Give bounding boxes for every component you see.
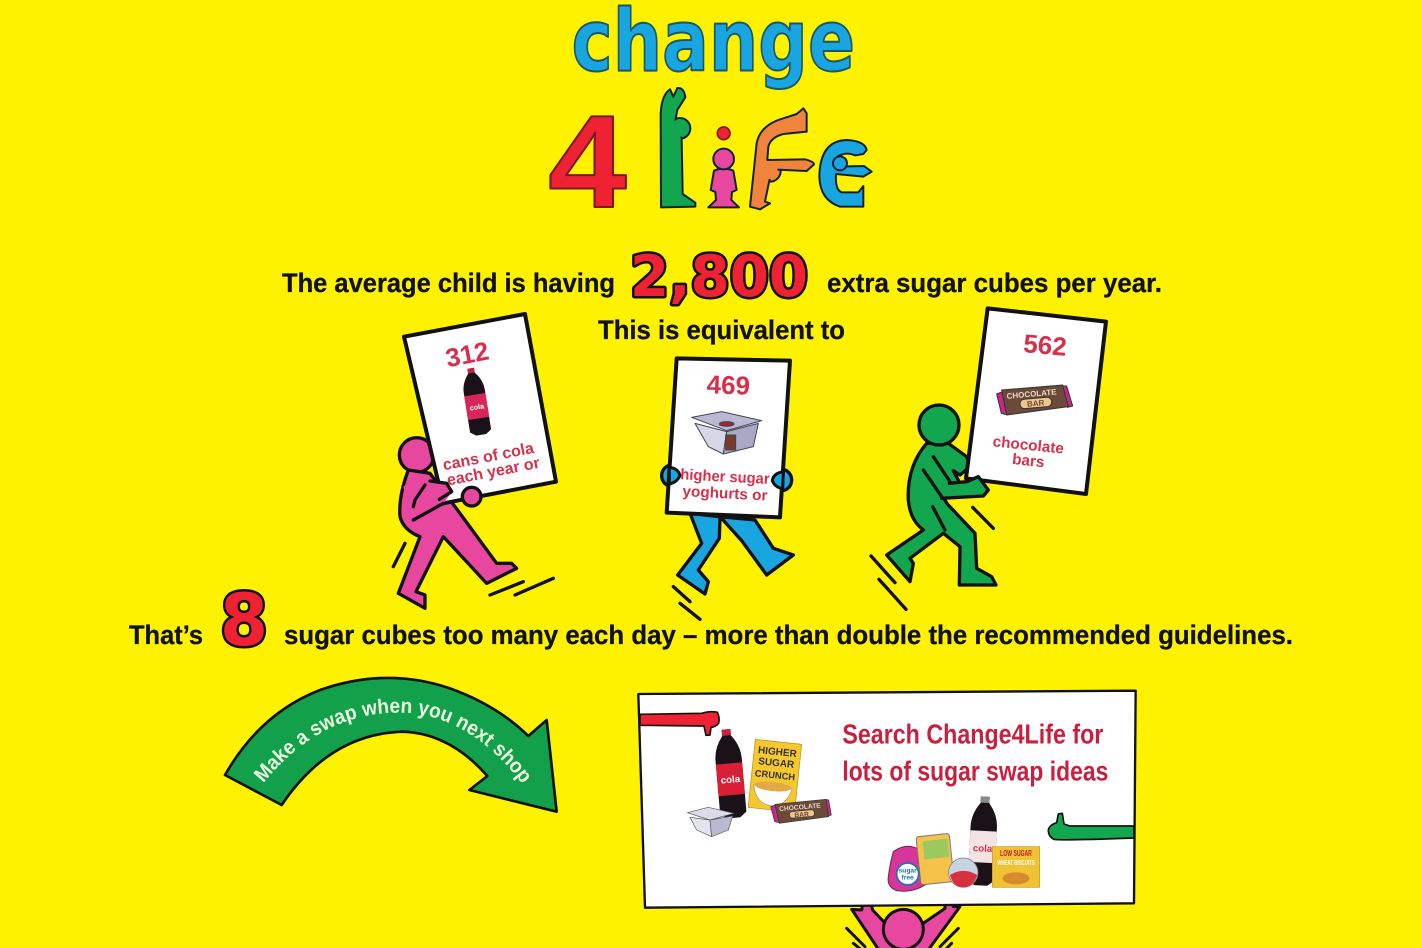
- low sugar cereal box: WHEAT BISCUITS: [997, 858, 1035, 867]
- low sugar cereal box: LOW SUGAR: [1000, 848, 1032, 858]
- body lines and speed lines: [871, 457, 993, 609]
- icon: chocolate bar: [997, 385, 1073, 415]
- fruit pot: [949, 858, 978, 887]
- green figure head: [919, 405, 959, 445]
- sign number: 312: 312: [443, 335, 491, 373]
- higher sugar cereal box: SUGAR: [758, 756, 795, 771]
- sugar free jelly: [888, 846, 927, 891]
- green hand: [940, 477, 988, 498]
- speed lines: [393, 543, 553, 595]
- sign caption: each year or: each year or: [446, 455, 541, 489]
- chocolate bar: [771, 799, 831, 823]
- higher sugar cereal box: CRUNCH: [754, 768, 796, 782]
- higher sugar cereal box: HIGHER: [757, 745, 797, 760]
- figure: pink carrying cola sign: [393, 314, 556, 608]
- diet cola bottle: [967, 796, 999, 886]
- logo letter i: pink figure: [708, 149, 739, 207]
- sign caption: yoghurts or: yoghurts or: [682, 483, 768, 505]
- panel background: [638, 691, 1136, 908]
- headline text: average child: The average child is having: [282, 268, 615, 298]
- arrow: make a swap: [224, 676, 558, 813]
- green hand outline: [942, 477, 988, 498]
- logo letter e: blue figure: [819, 140, 872, 207]
- icon: chocolate bar: CHOCOLATE: [1006, 387, 1058, 401]
- sign caption: higher sugar: higher sugar: [680, 466, 770, 488]
- panel: sugar swap ideas: [638, 691, 1136, 948]
- blue legs: [678, 513, 793, 594]
- sign number: 562: 562: [1022, 328, 1068, 362]
- sign caption: chocolate: chocolate: [992, 433, 1065, 458]
- sign caption: cans of cola: cans of cola: [441, 440, 536, 474]
- sign number: 469: 469: [706, 369, 751, 401]
- panel text line two: lots of sugar swap ideas: [842, 756, 1108, 787]
- sign: chocolate: [966, 308, 1106, 494]
- icon: chocolate bar: BAR: [1027, 398, 1045, 409]
- chocolate bar: BAR: [794, 811, 809, 819]
- figure: blue carrying yoghurt sign: [662, 358, 793, 619]
- headline line two: This is equivalent to: [598, 315, 845, 345]
- logo letter F: orange figure: [750, 108, 814, 209]
- big number: 8: 8: [220, 578, 268, 662]
- pink arm and hand: [403, 477, 481, 520]
- speed lines: [673, 587, 700, 619]
- sugar free jelly: sugar: [899, 868, 917, 875]
- icon: cola bottle: [460, 367, 492, 437]
- blue fingers over sign: [669, 467, 783, 489]
- green figure body: [887, 443, 996, 585]
- sign caption: bars: bars: [1011, 451, 1045, 471]
- logo letter L: green figure: [661, 88, 695, 207]
- big number: 2,800: 2,800: [630, 244, 808, 310]
- icon: yoghurt pot: [692, 412, 762, 454]
- sign: cola: [404, 314, 556, 503]
- statement line: [129, 578, 1293, 662]
- pink figure body: [398, 470, 517, 608]
- headline line one: [282, 244, 1162, 310]
- hand: red thumbs down: [640, 712, 719, 735]
- cola bottle: [713, 728, 747, 819]
- yoghurt pot: [687, 807, 734, 837]
- statement text: that's: That’s: [129, 620, 203, 650]
- low sugar cereal box: [992, 847, 1040, 887]
- panel text line one: Search Change4Life for: [842, 718, 1104, 749]
- diet cola bottle: cola: [973, 843, 993, 855]
- higher sugar cereal box: [748, 739, 802, 812]
- pink figure head: [399, 438, 434, 472]
- sign: yoghurt: [667, 358, 790, 517]
- cola bottle: cola: [720, 774, 741, 787]
- statement text: sugar cubes: sugar cubes too many each day – more than double the recommended guidelines.: [284, 620, 1293, 650]
- logo dot: red: [717, 127, 730, 140]
- sugar free jelly: free: [902, 874, 914, 881]
- icon: cola bottle: cola: [469, 401, 486, 413]
- chocolate bar: CHOCOLATE: [779, 802, 822, 813]
- cereal pouch: [916, 833, 954, 885]
- headline text: extra sugar cubes: extra sugar cubes per year.: [827, 268, 1162, 298]
- hand: green thumbs up: [1048, 813, 1134, 840]
- pink figure holding panel: [847, 900, 960, 948]
- arrow shape: [225, 678, 557, 812]
- logo: change4life: [548, 0, 872, 235]
- products: higher sugar: [687, 728, 831, 837]
- figure: green carrying chocolate sign: [871, 308, 1106, 609]
- products: lower sugar: [888, 796, 1040, 891]
- arrow text: Make a swap when you next shop: [253, 698, 530, 782]
- logo numeral: 4: 4: [548, 88, 627, 235]
- blue hands: [662, 465, 792, 491]
